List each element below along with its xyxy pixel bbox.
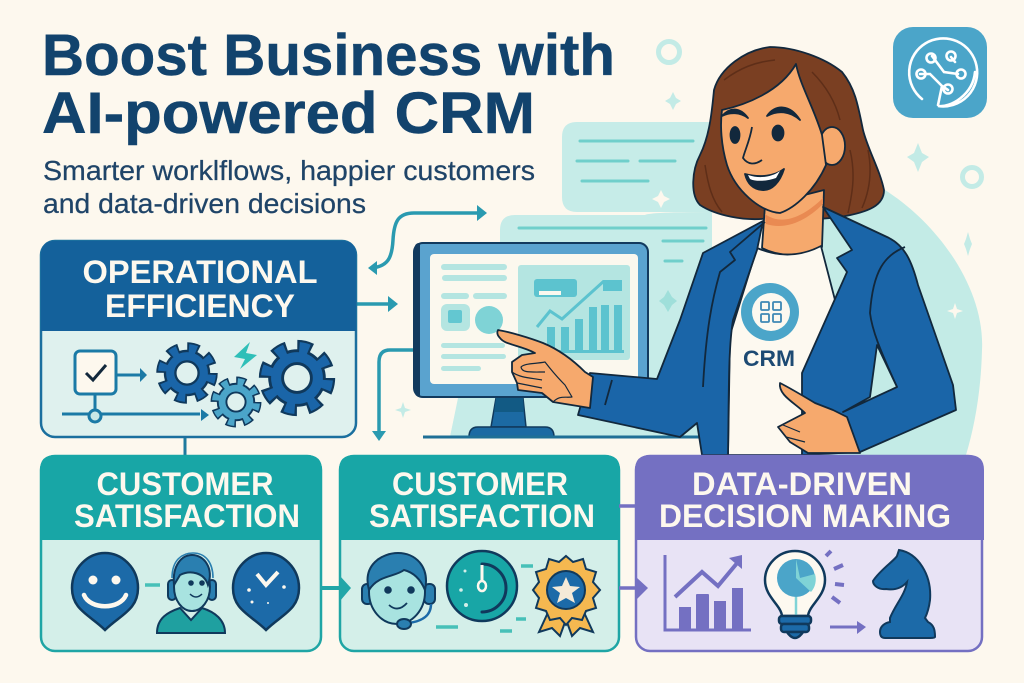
vertical link [184, 438, 186, 455]
dashes [436, 566, 533, 631]
heading: DATA-DRIVEN [692, 466, 912, 502]
right sleeve line [870, 247, 905, 387]
heading [659, 466, 951, 534]
jacket left [578, 221, 763, 455]
monitor [414, 243, 705, 437]
icon: AI brain logo [893, 27, 987, 118]
subtitle: Smarter worklflows, happier customers [43, 155, 535, 186]
shirt logo: CRM [743, 346, 795, 371]
heading: DECISION MAKING [659, 498, 951, 534]
operational efficiency card [41, 241, 356, 437]
data-driven decision making card [635, 455, 984, 651]
heading [82, 254, 318, 324]
connector arrows [356, 205, 487, 441]
screen left content [441, 264, 507, 371]
decorative rings and sparkles [395, 42, 982, 418]
arrow between cards [320, 576, 351, 601]
heading: OPERATIONAL [82, 254, 318, 290]
pointing hand [497, 330, 593, 408]
rays [826, 551, 844, 603]
title [42, 23, 615, 146]
card frame [41, 241, 356, 437]
icon: support agent [157, 553, 225, 633]
card frame [340, 456, 619, 651]
subtitle: and data-driven decisions [43, 188, 366, 219]
heading: CUSTOMER [96, 466, 274, 502]
customer satisfaction card 1 [40, 455, 322, 651]
background blobs [450, 122, 982, 455]
shirt [728, 246, 835, 455]
nose [743, 127, 762, 164]
neck [762, 190, 824, 255]
hair back [693, 47, 884, 219]
icon: checkbox flow [62, 351, 209, 422]
purple connectors [619, 506, 648, 600]
gap between arm and body [843, 345, 897, 412]
customer satisfaction card 2 [339, 455, 620, 651]
icon: headset face [362, 553, 435, 629]
title: AI-powered CRM [42, 81, 535, 146]
monitor stand [423, 398, 705, 437]
icon: lightbulb [765, 551, 825, 638]
screen [430, 254, 638, 384]
resting hand [778, 383, 860, 453]
icon: award ribbon [533, 556, 600, 636]
eyes [730, 127, 740, 143]
card frame [636, 456, 982, 651]
heading: SATISFACTION [369, 498, 595, 534]
brows [722, 107, 800, 120]
face [721, 64, 826, 213]
subtitle [43, 155, 535, 219]
heading: EFFICIENCY [105, 288, 295, 324]
presenter [497, 47, 956, 455]
heading [369, 466, 595, 534]
icon: knight [873, 550, 935, 638]
screen chart [518, 265, 630, 360]
mouth [745, 169, 784, 190]
ear [819, 127, 845, 165]
shirt logo [741, 283, 799, 371]
icon: growth chart [665, 555, 751, 630]
icon: smiley pin [72, 553, 138, 630]
icon: clock pin [233, 553, 299, 630]
arrow [830, 621, 866, 634]
heading [74, 466, 300, 534]
card frame [41, 456, 321, 651]
title: Boost Business with [42, 23, 615, 88]
monitor frame [414, 243, 648, 397]
heading: CUSTOMER [392, 466, 568, 502]
left lapel [605, 222, 765, 405]
heading: SATISFACTION [74, 498, 300, 534]
icon: stopwatch [447, 551, 517, 621]
icon: gears [163, 342, 327, 422]
jacket right [802, 207, 956, 455]
